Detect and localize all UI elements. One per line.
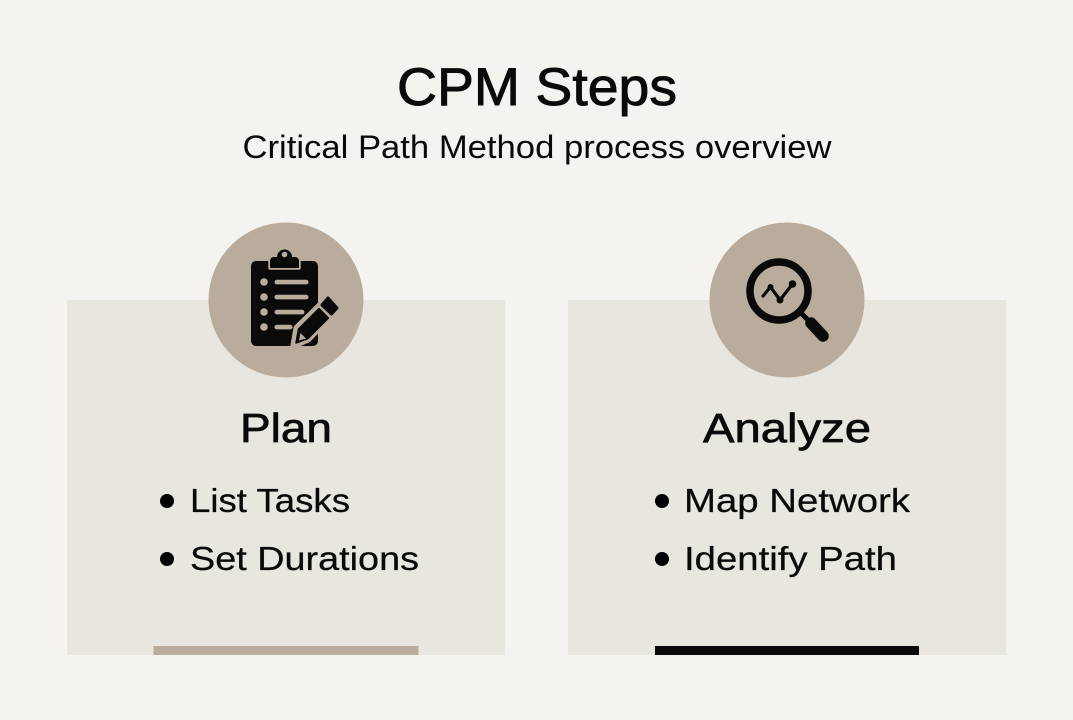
list: analyze items bbox=[655, 482, 911, 577]
subtitle: Critical Path Method process overview bbox=[242, 129, 832, 165]
panel: plan bbox=[67, 222, 505, 655]
list: plan items: List Tasks bbox=[190, 482, 350, 519]
panel background bbox=[568, 300, 1006, 655]
list: analyze items: Identify Path bbox=[684, 540, 897, 577]
icon: clipboard and pencil bbox=[208, 222, 364, 378]
list: plan items: Set Durations bbox=[190, 540, 419, 577]
panel background bbox=[67, 300, 505, 655]
heading: plan: Plan bbox=[240, 405, 332, 451]
accent bar: plan bbox=[154, 646, 418, 655]
heading: analyze: Analyze bbox=[703, 405, 871, 451]
list: analyze items: Map Network bbox=[684, 482, 911, 519]
panel: analyze bbox=[568, 222, 1006, 655]
accent bar: analyze bbox=[655, 646, 919, 655]
list: plan items bbox=[160, 482, 419, 577]
icon: magnifier with trend line bbox=[710, 222, 864, 378]
title: CPM Steps bbox=[397, 58, 677, 117]
